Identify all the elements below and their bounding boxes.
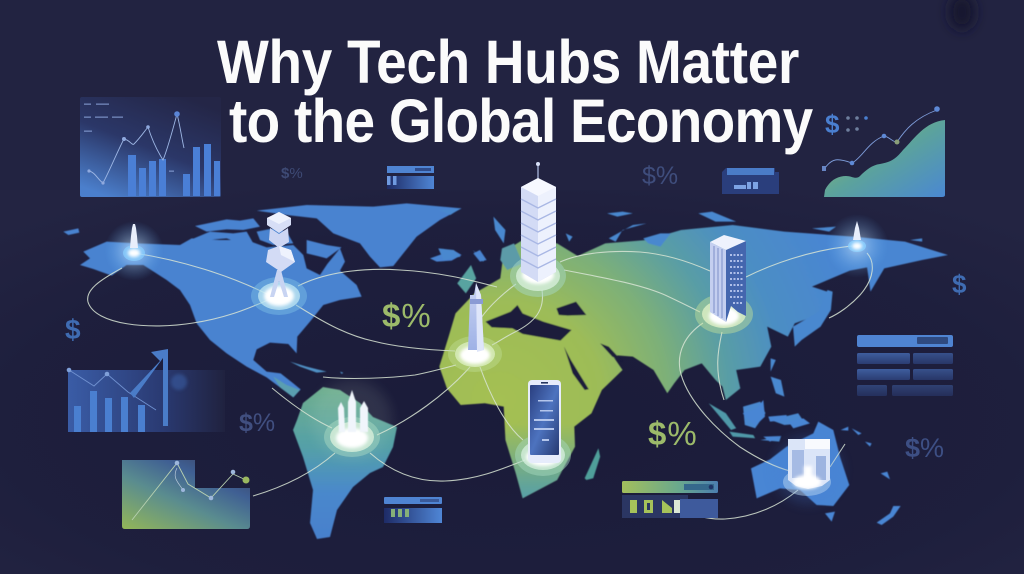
map: northern islands and Scandinavia [438, 208, 922, 480]
map: South America [293, 387, 397, 539]
symbol: green dollar percent indian ocean: $% [648, 415, 697, 452]
map: Eurasia and Africa [438, 208, 948, 498]
connection lines [88, 246, 872, 519]
symbol: muted dollar percent right: $% [905, 433, 944, 463]
map: North America [63, 203, 487, 397]
hub: South America towers [312, 380, 392, 460]
symbol: muted dollar percent top centre: $% [642, 162, 678, 190]
symbol: muted dollar percent top left: $% [281, 165, 303, 182]
chart: top left line and bars [80, 97, 221, 197]
small widget: top centre-right [722, 168, 779, 194]
symbol: blue dollar left: $ [65, 314, 81, 345]
map: seas [485, 302, 623, 390]
title: Why Tech Hubs Matter [217, 28, 799, 97]
map: Japan, SE Asia, Madagascar [743, 290, 833, 442]
currency symbols [65, 162, 967, 463]
dollar and dots: $ [825, 109, 840, 139]
title [217, 28, 813, 156]
decorative dark smudge [949, 0, 975, 30]
symbol: blue dollar right: $ [952, 269, 967, 299]
symbol: muted dollar percent left: $% [239, 409, 275, 437]
chart: bottom left green [122, 460, 250, 529]
hub: China office tower [695, 235, 753, 334]
chart: top right area [822, 106, 945, 197]
small widget: top centre-left [387, 166, 434, 189]
world map [63, 203, 948, 539]
map: Australia and islands [743, 400, 901, 525]
small widget: bottom centre green [622, 481, 718, 518]
map: Greenland [257, 203, 462, 267]
hub: South Africa smartphone [515, 380, 571, 476]
hub: Europe skyscraper [510, 162, 566, 297]
hub: West Africa spire [448, 283, 502, 372]
title: to the Global Economy [229, 87, 813, 156]
symbol: green dollar percent atlantic: $% [382, 297, 431, 334]
small widget: bottom centre-left [384, 497, 442, 523]
hub: Siberia spire [825, 214, 889, 278]
small widget: right panel rows [857, 335, 953, 396]
hub: North America tower [251, 212, 307, 315]
hub: Australia building [774, 436, 842, 504]
hub: Alaska [104, 221, 164, 281]
chart: middle left with arrow [67, 349, 225, 432]
